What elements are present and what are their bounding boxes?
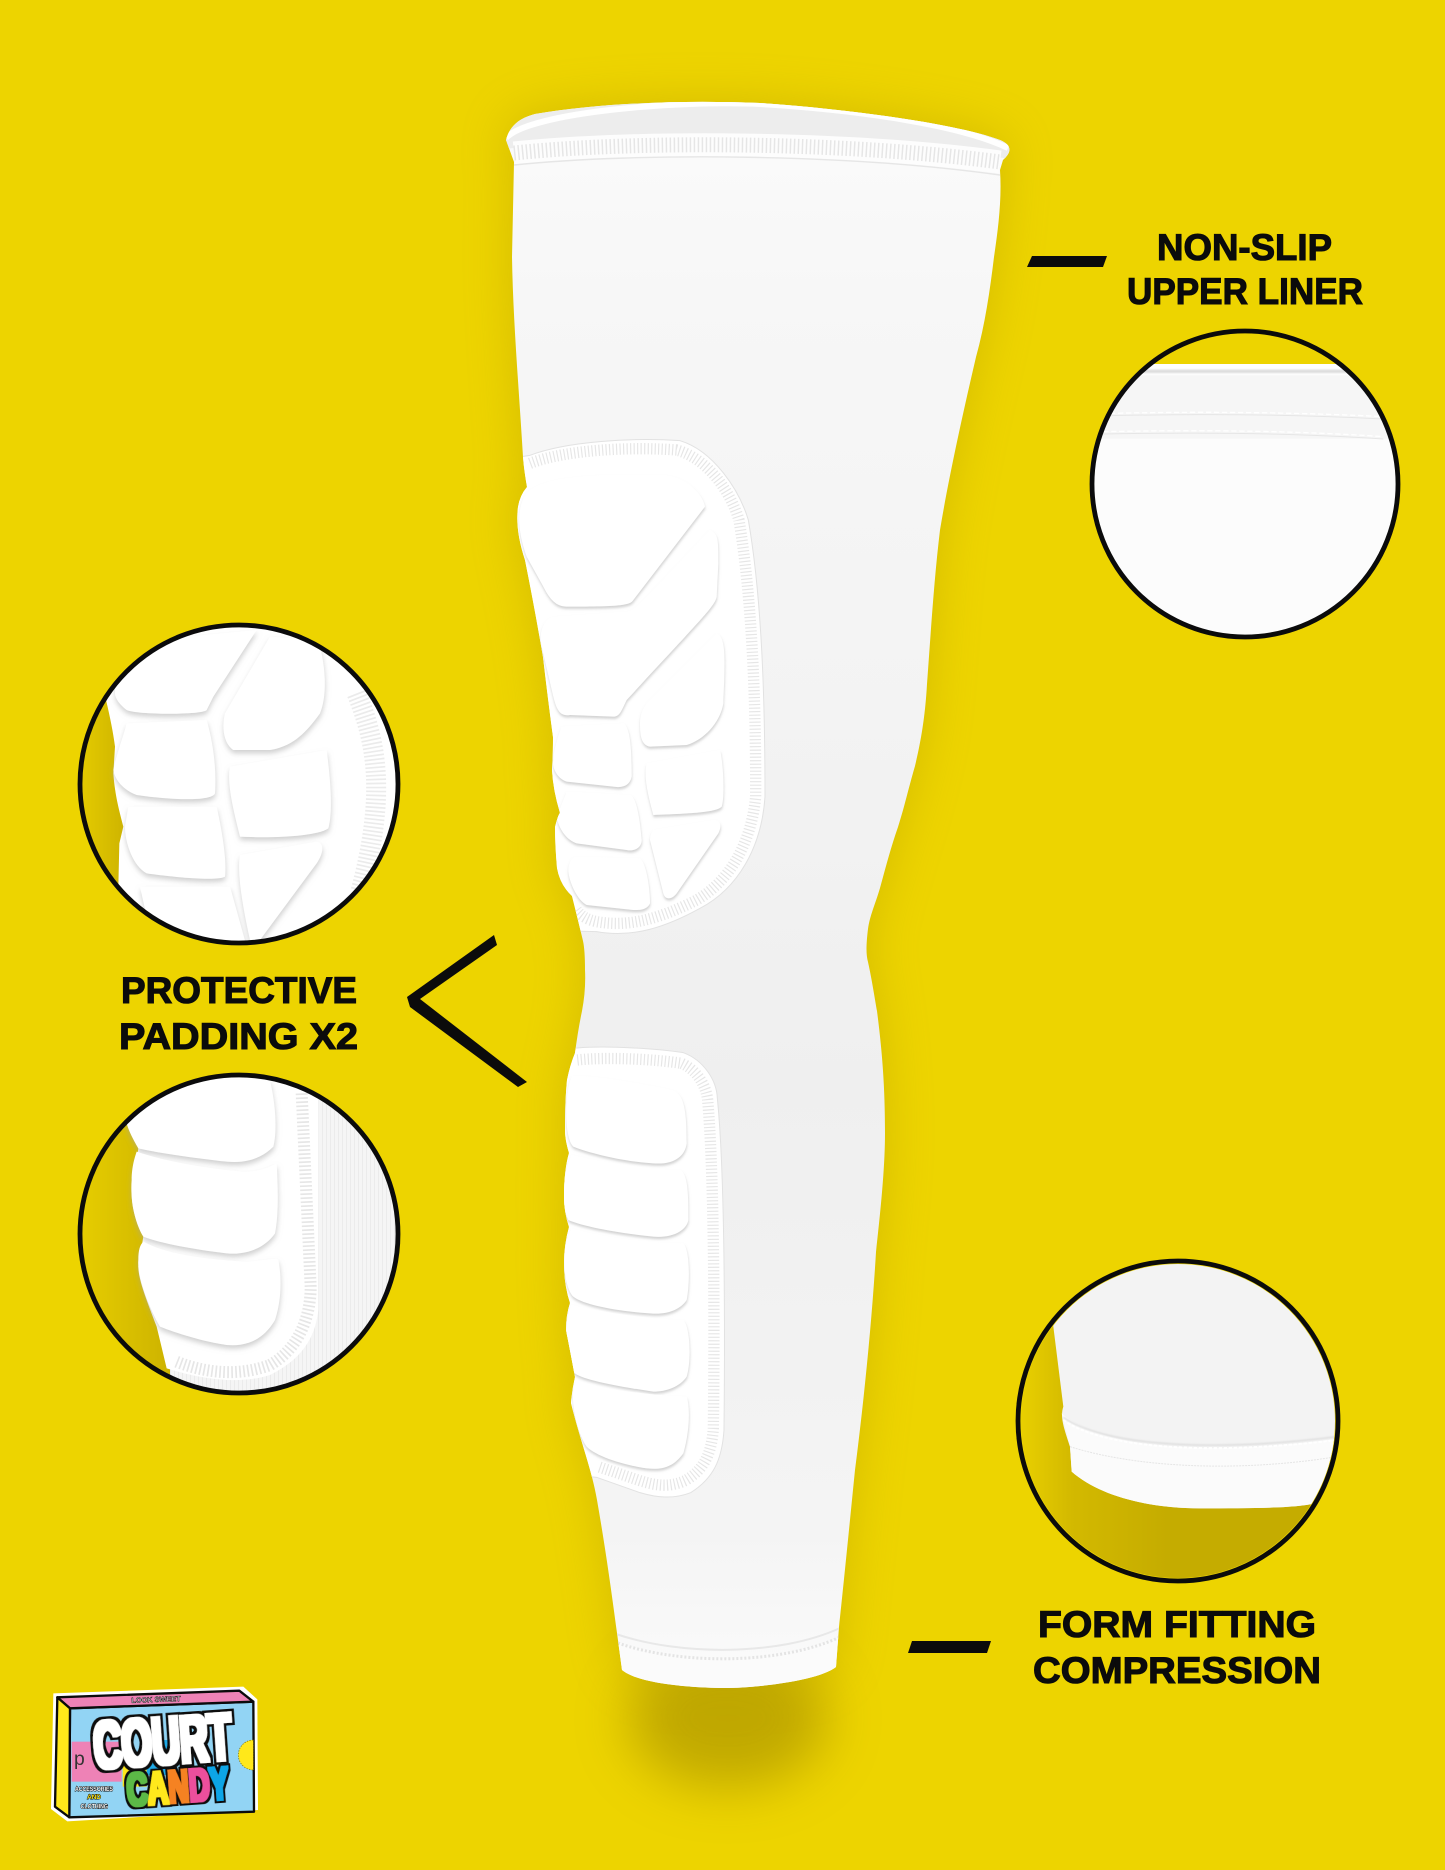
bottom cuff hem [612,1628,842,1690]
detail circle: upper liner [1090,328,1400,640]
box top [57,1691,253,1708]
text: non-slip: NON-SLIP [1157,227,1332,268]
detail circle: compression cuff [1016,1258,1340,1584]
sleeve body [506,102,1009,1688]
upper pad segments [519,475,725,910]
text: padding x2: PADDING X2 [119,1016,358,1057]
label: form fitting compression [908,1604,1321,1691]
lower shin pad [564,1046,725,1498]
label: non-slip upper liner [1027,227,1363,312]
upper knee pad [500,440,765,934]
pad seam [177,1093,311,1372]
lower pad base [564,1046,725,1498]
text: compression: COMPRESSION [1033,1650,1321,1691]
sticker outline [51,1687,258,1821]
text: protective: PROTECTIVE [121,970,357,1011]
liner fabric [1094,368,1396,635]
box artwork: p [74,1749,85,1770]
hem band [1062,1413,1340,1508]
shadow below cuff [1029,1317,1335,1578]
ribbed fabric [170,1369,270,1391]
label: protective padding [119,935,527,1087]
logo: Court Candy box [51,1687,258,1821]
small lettering: ACCESSORIES [75,1786,113,1793]
dash: cuff [908,1641,991,1653]
compression sleeve [500,100,1015,1690]
stitch lines [1110,415,1383,419]
shadowed background [84,1125,170,1374]
detail circle: knee padding [70,610,410,950]
detail circle: shin padding [70,1060,410,1400]
box side [55,1697,70,1817]
cuff fabric [1053,1264,1335,1508]
arrow: chevron to both pads [407,935,527,1087]
COURT wordmark: COURT [91,1700,234,1784]
box front [69,1702,254,1817]
top rim and upper band [500,100,1015,175]
small lettering: AND [87,1794,101,1801]
pad surface [127,1060,318,1380]
text: form fitting: FORM FITTING [1038,1604,1316,1645]
shadowed background [82,701,124,884]
small lettering [75,1786,113,1810]
drop shadow under sleeve [506,102,1009,1788]
box artwork [72,1740,253,1787]
dash: upper liner [1027,256,1107,267]
pad segments [127,1080,281,1345]
text: upper liner: UPPER LINER [1127,271,1363,312]
hem stitching [1063,1417,1337,1445]
pad segments [113,630,331,947]
lower pad segments [564,1076,690,1469]
pad seam [357,693,376,893]
CANDY wordmark: CANDY [125,1757,230,1816]
small lettering: CLOTHING [81,1803,108,1810]
pad surface [106,627,396,940]
upper pad base [500,440,765,934]
top lettering: LOOK SWEET [131,1694,181,1705]
